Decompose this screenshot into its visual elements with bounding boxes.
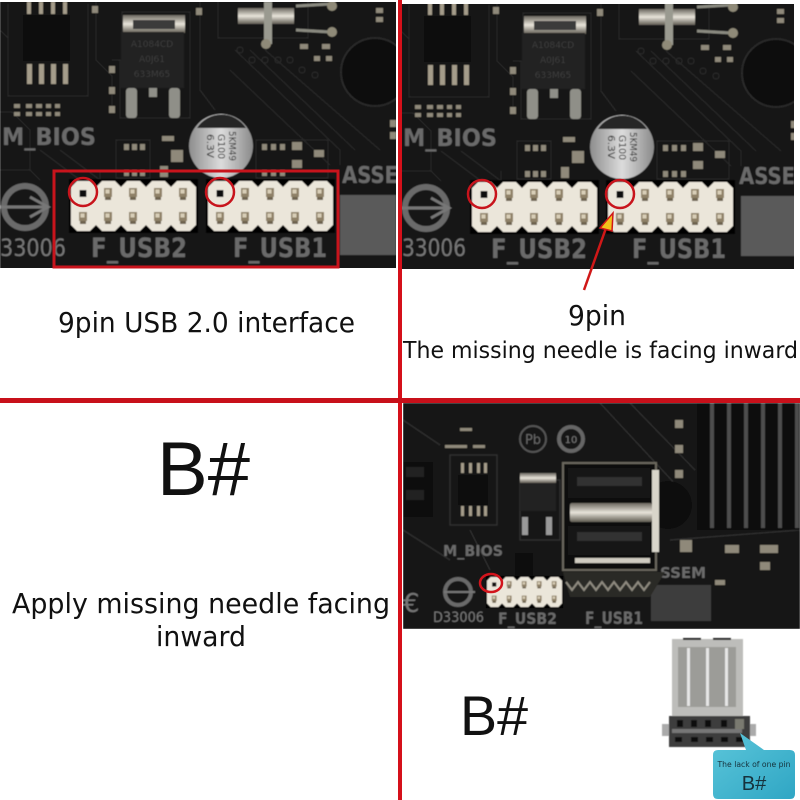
missing pin circle: right — [606, 180, 634, 208]
callout: the lack of one pin — [713, 733, 795, 799]
arrow pointing to missing pin — [584, 213, 613, 290]
missing pin circle: F_USB1 — [206, 178, 234, 206]
icon: USB plug with missing pin — [662, 638, 756, 747]
panel: motherboard with USB port: € — [403, 589, 420, 619]
callout box around connectors — [54, 171, 338, 267]
heading: small B#: B# — [460, 684, 528, 747]
BIOS chip — [458, 475, 488, 505]
panel: board photo with arrow: F_USB1 — [632, 234, 726, 265]
text: panel 3 description: inward — [156, 620, 246, 653]
divider: horizontal red line — [0, 398, 800, 403]
callout: the lack of one pin: The lack of one pin — [717, 760, 790, 769]
missing pin circle — [480, 574, 502, 592]
panel: motherboard with USB port: F_USB1 — [585, 609, 643, 629]
panel: board photo with connectors outlined: F_USB2 — [91, 233, 187, 264]
text: panel 3 description — [12, 587, 390, 653]
panel: motherboard with USB port — [403, 403, 800, 629]
heading: large B#: B# — [157, 427, 250, 512]
text: 9pin label: 9pin — [568, 299, 626, 332]
heatsink — [697, 403, 800, 530]
panel: motherboard with USB port: D33006 — [433, 610, 484, 626]
text: panel 1 caption: 9pin USB 2.0 interface — [58, 306, 355, 339]
panel: motherboard with USB port: SSEM — [660, 564, 706, 582]
panel: board photo with connectors outlined: F_USB1 — [233, 233, 327, 264]
panel: motherboard with USB port: F_USB2 — [498, 609, 557, 628]
dual USB port — [563, 463, 665, 597]
text: panel 3 description: Apply missing needle facing — [12, 587, 390, 620]
panel: board photo with arrow — [401, 1, 800, 290]
panel: board photo with arrow: F_USB2 — [491, 234, 587, 265]
regulator — [522, 484, 556, 510]
panel: board photo with connectors outlined — [0, 0, 409, 270]
panel: board photo with connectors outlined: M_BIOS — [2, 123, 96, 151]
missing pin circle: F_USB2 — [69, 178, 97, 206]
left socket — [403, 462, 433, 517]
panel: motherboard with USB port: 10 — [565, 435, 577, 446]
divider: vertical red line — [398, 0, 402, 800]
missing pin circle: left — [468, 180, 496, 208]
panel: motherboard with USB port: M_BIOS — [443, 542, 503, 560]
panel: motherboard with USB port: Pb — [525, 433, 541, 448]
panel: board photo with connectors outlined: ASSE — [342, 163, 398, 189]
callout: the lack of one pin: B# — [742, 773, 767, 795]
panel: board photo with arrow: M_BIOS — [403, 124, 497, 152]
panel: board photo with connectors outlined: 33006 — [0, 234, 66, 262]
panel: board photo with arrow: 33006 — [402, 234, 466, 262]
